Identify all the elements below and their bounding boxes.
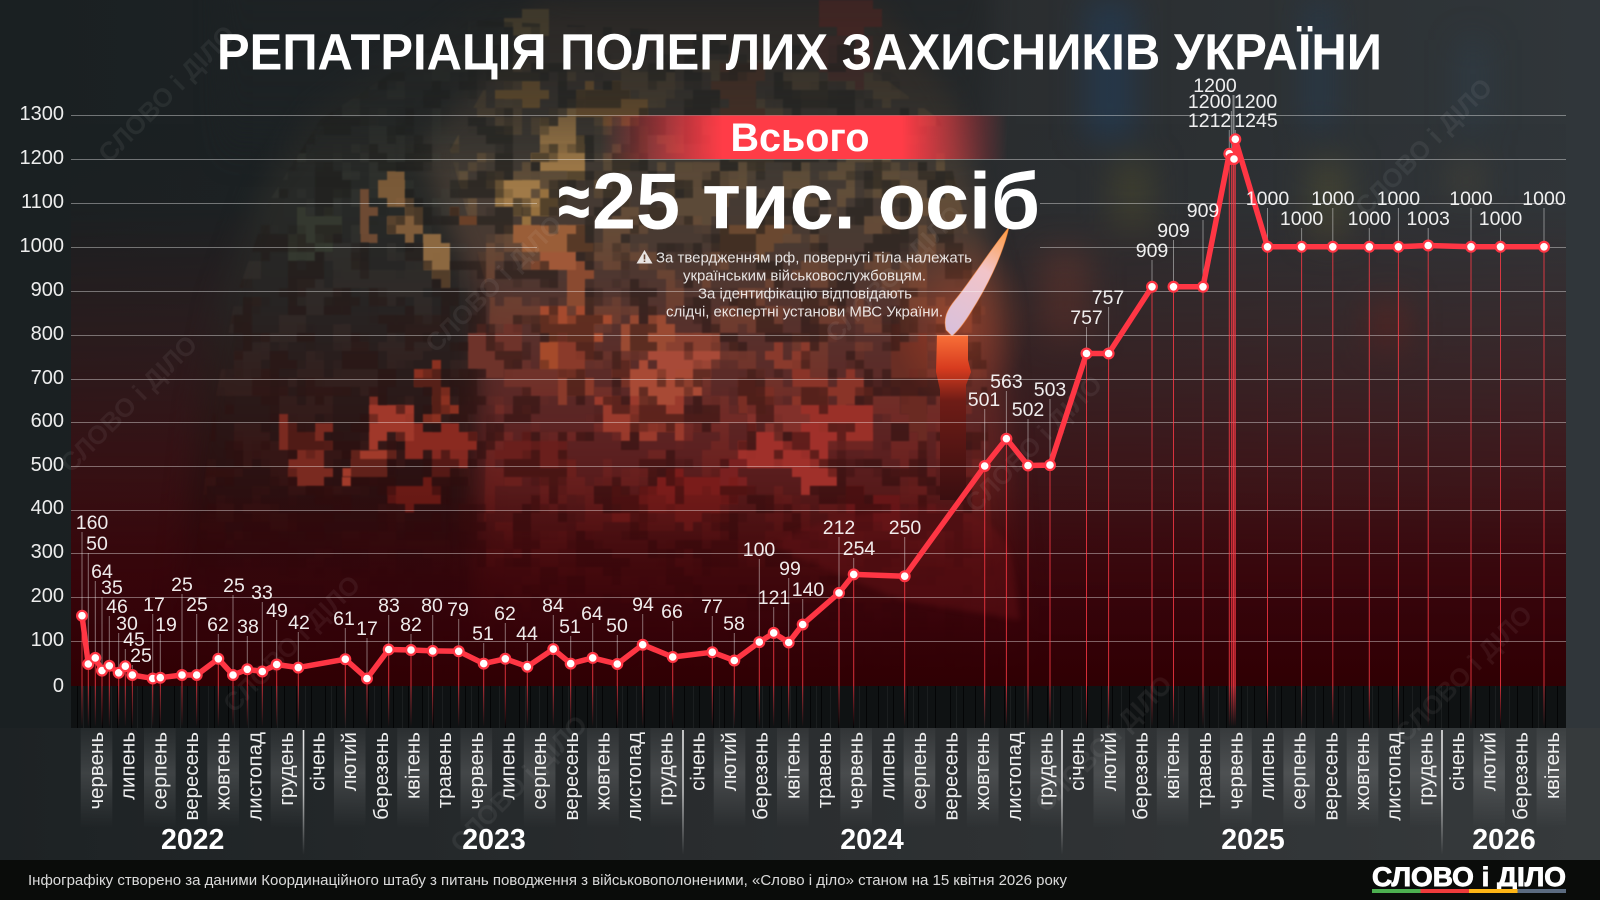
year labels: 2024 (840, 824, 904, 856)
month labels: липень (1256, 732, 1279, 800)
camouflage patches (280, 0, 935, 523)
y axis labels: 900 (31, 279, 64, 301)
month labels: листопад (1003, 732, 1026, 821)
month labels: квітень (1161, 732, 1184, 799)
value labels: 254 (843, 538, 875, 560)
year labels: 2023 (462, 824, 526, 856)
value labels: 61 (333, 608, 355, 630)
watermarks: СЛОВО і ДІЛО (419, 209, 568, 358)
note text: За твердженням рф, повернуті тіла належать (656, 250, 972, 266)
month labels: березень (1130, 732, 1152, 820)
value labels: 51 (559, 616, 581, 638)
y axis labels: 1100 (21, 191, 64, 213)
data line (82, 139, 1544, 678)
value labels: 17 (143, 594, 165, 616)
value labels: 79 (447, 599, 469, 621)
value labels: 25 (186, 594, 208, 616)
value labels: 25 (130, 645, 152, 667)
value labels: 1000 (1348, 208, 1391, 230)
value labels: 1212 (1188, 110, 1231, 132)
watermarks: СЛОВО і ДІЛО (444, 709, 593, 858)
month labels: жовтень (212, 732, 235, 810)
value labels: 30 (116, 613, 138, 635)
month labels: травень (813, 732, 836, 808)
value labels: 35 (101, 577, 123, 599)
y axis labels: 0 (53, 675, 64, 697)
month labels: жовтень (971, 732, 994, 810)
line chart (76, 75, 1566, 727)
value labels: 757 (1092, 287, 1124, 309)
month labels: червень (1224, 732, 1247, 810)
y axis labels (20, 103, 64, 697)
value labels (76, 75, 1566, 667)
value labels: 1000 (1377, 188, 1420, 210)
total value: 25 тис. осіб (592, 156, 1040, 246)
month labels: червень (845, 732, 868, 810)
month labels: лютий (1098, 732, 1121, 791)
value labels: 1200 (1234, 91, 1277, 113)
month labels: січень (1446, 732, 1469, 791)
month labels: вересень (560, 732, 583, 821)
value labels: 17 (356, 618, 378, 640)
y axis labels: 500 (31, 454, 64, 476)
value labels: 160 (76, 512, 108, 534)
month labels (85, 732, 1564, 821)
y axis labels: 400 (31, 497, 64, 519)
value labels: 909 (1136, 240, 1168, 262)
value labels: 100 (743, 539, 775, 561)
value labels: 33 (251, 582, 273, 604)
month labels: квітень (1541, 732, 1564, 799)
month labels: квітень (781, 732, 804, 799)
dark band under the zero line (71, 686, 1566, 728)
data points (77, 134, 1549, 683)
logo colour bar (1372, 889, 1566, 893)
total value: ≈ (558, 156, 590, 246)
note text: слідчі, експертні установи МВС України. (666, 304, 943, 320)
y axis labels: 1000 (20, 235, 64, 257)
y axis labels: 1300 (20, 103, 64, 125)
soldier arm (192, 136, 470, 536)
month labels: вересень (940, 732, 963, 821)
value labels: 49 (266, 600, 288, 622)
value labels: 42 (288, 612, 310, 634)
month labels: серпень (1288, 732, 1311, 810)
month labels: серпень (148, 732, 171, 810)
value labels: 909 (1187, 200, 1219, 222)
value labels: 502 (1012, 399, 1044, 421)
value labels: 121 (758, 587, 790, 609)
value labels: 38 (237, 616, 259, 638)
y axis labels: 1200 (20, 147, 64, 169)
value labels: 212 (823, 517, 855, 539)
month stripes (81, 728, 1566, 828)
month labels: січень (686, 732, 709, 791)
value labels: 94 (632, 594, 654, 616)
value labels: 250 (889, 517, 921, 539)
leader lines above points (82, 95, 1544, 678)
month labels: серпень (528, 732, 551, 810)
month labels: листопад (243, 732, 266, 821)
year labels: 2026 (1472, 824, 1536, 856)
value labels: 909 (1157, 220, 1190, 242)
value labels: 140 (792, 579, 824, 601)
arm camouflage texture (206, 373, 461, 490)
month band background (0, 728, 1600, 860)
value labels: 1000 (1246, 188, 1289, 210)
value labels: 563 (990, 371, 1023, 393)
value labels: 501 (968, 389, 1000, 411)
month labels: листопад (1383, 732, 1406, 821)
month labels: грудень (1414, 732, 1437, 806)
month labels: вересень (1319, 732, 1342, 821)
month labels: вересень (180, 732, 203, 821)
value labels: 1000 (1449, 188, 1493, 210)
value labels: 1000 (1522, 188, 1566, 210)
watermarks: СЛОВО і ДІЛО (54, 329, 203, 478)
watermarks: СЛОВО і ДІЛО (1029, 669, 1178, 818)
value labels: 77 (701, 596, 723, 618)
year separators (303, 730, 1443, 855)
value labels: 46 (106, 596, 128, 618)
month labels: жовтень (1351, 732, 1374, 810)
month labels: грудень (275, 732, 298, 806)
value labels: 757 (1070, 307, 1103, 329)
grid lines (71, 116, 1566, 642)
month labels: травень (1193, 732, 1216, 808)
y axis labels: 800 (31, 323, 64, 345)
top dimming of the photo (449, 0, 965, 162)
blurred lights on the right (1040, 0, 1486, 350)
value labels: 44 (516, 623, 538, 645)
value labels: 50 (86, 533, 108, 555)
value labels: 1200 (1188, 91, 1231, 113)
value labels: 503 (1034, 379, 1066, 401)
low red dimming of the photo (487, 519, 942, 612)
month labels: жовтень (591, 732, 614, 810)
watermarks: СЛОВО і ДІЛО (1349, 72, 1498, 221)
value labels: 84 (542, 595, 564, 617)
value labels: 62 (494, 603, 516, 625)
month labels: березень (370, 732, 393, 820)
value labels: 58 (723, 613, 745, 635)
month labels: липень (496, 732, 519, 800)
value labels: 1000 (1479, 208, 1522, 230)
chest camouflage texture (450, 61, 990, 532)
year labels: 2022 (161, 824, 224, 856)
month labels: травень (433, 732, 456, 808)
soldier chest (424, 6, 1016, 602)
value labels: 19 (155, 614, 177, 636)
month labels: лютий (718, 732, 741, 791)
logo (1372, 862, 1566, 893)
note text: українським військовослужбовцям. (683, 268, 926, 284)
value labels: 25 (223, 575, 245, 597)
y axis labels: 200 (31, 585, 64, 607)
month labels: березень (750, 732, 773, 820)
year labels: 2025 (1221, 824, 1285, 856)
y axis labels: 100 (31, 629, 64, 651)
year labels (161, 824, 1536, 856)
month labels: грудень (1034, 732, 1058, 806)
month labels: серпень (908, 732, 931, 810)
candle flame (945, 227, 1009, 336)
value labels: 82 (400, 614, 422, 636)
watermarks: СЛОВО і ДІЛО (217, 569, 366, 718)
y axis labels: 600 (31, 410, 64, 432)
leader lines below points (82, 139, 1544, 727)
month labels: лютий (338, 732, 361, 791)
month labels: листопад (623, 732, 646, 821)
y axis labels: 700 (31, 367, 64, 389)
note text (636, 250, 972, 320)
value labels: 25 (171, 574, 193, 596)
month labels: січень (1066, 732, 1089, 791)
logo wordmark: СЛОВО і ДІЛО (1372, 862, 1566, 892)
month labels: лютий (1478, 732, 1501, 791)
hand holding candle (770, 507, 1020, 620)
month labels: червень (85, 732, 108, 810)
y axis labels: 300 (31, 541, 64, 563)
value labels: 50 (606, 615, 628, 637)
value labels: 1003 (1407, 208, 1450, 230)
candle body (936, 335, 971, 500)
candle glow (900, 243, 1020, 394)
month labels: січень (307, 732, 330, 791)
watermarks: СЛОВО і ДІЛО (92, 19, 241, 168)
value labels: 64 (91, 561, 113, 583)
watermarks: СЛОВО і ДІЛО (819, 199, 968, 348)
value labels: 51 (472, 623, 494, 645)
value labels: 1000 (1280, 208, 1323, 230)
icon: warning triangle (636, 250, 652, 264)
value labels: 1200 (1193, 75, 1237, 97)
month labels: грудень (655, 732, 678, 806)
background photo: soldier in camouflage with candle (71, 0, 1566, 686)
banner: total (600, 116, 1008, 160)
dark camouflage blotches (242, 22, 989, 569)
month labels: березень (1509, 732, 1532, 820)
month labels: червень (465, 732, 488, 810)
value labels: 45 (123, 629, 145, 651)
value labels: 64 (581, 603, 603, 625)
value labels: 1000 (1311, 188, 1355, 210)
footer band (0, 860, 1600, 900)
red overlay (71, 274, 1566, 666)
source note: Інфографіку створено за даними Координаційного штабу з питань поводження з військовополоненими, «Слово і діло» станом на 15 квітня 2026 року (28, 872, 1068, 889)
value labels: 80 (421, 595, 443, 617)
note text: За ідентифікацію відповідають (698, 286, 912, 302)
month labels: липень (117, 732, 140, 800)
value labels: 83 (378, 595, 400, 617)
watermarks: СЛОВО і ДІЛО (959, 369, 1108, 518)
month labels: липень (876, 732, 899, 800)
value labels: 66 (661, 601, 683, 623)
value labels: 1245 (1234, 110, 1278, 132)
watermarks: СЛОВО і ДІЛО (1389, 599, 1538, 748)
month labels: квітень (402, 732, 424, 799)
value labels: 99 (779, 558, 801, 580)
banner label: Всього (731, 116, 869, 160)
title: РЕПАТРІАЦІЯ ПОЛЕГЛИХ ЗАХИСНИКІВ УКРАЇНИ (217, 24, 1382, 80)
value labels: 62 (207, 614, 229, 636)
